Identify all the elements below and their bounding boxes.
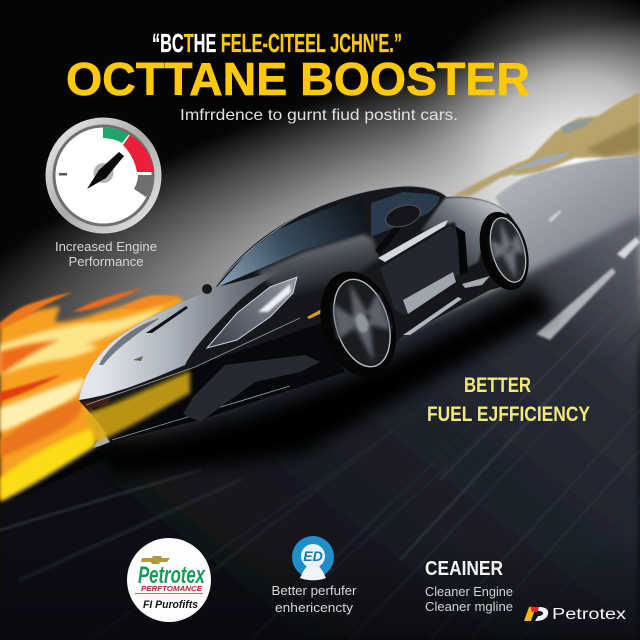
- icon: speed gauge: [46, 118, 162, 234]
- car: side intake: [455, 226, 468, 275]
- car: rear wheel: [472, 206, 537, 296]
- kicker line: “BCTHE FELE-CITEEL JCHN'E.”: [152, 28, 402, 58]
- car: front wheel: [308, 262, 408, 386]
- feature: cleaner engine: Cleaner mgline: [425, 600, 513, 614]
- logo wordmark: Petrotex: [552, 606, 626, 623]
- bottom vignette: [0, 540, 640, 640]
- icon: Petrotex mark: [524, 606, 548, 621]
- car: main body silhouette: [79, 186, 526, 441]
- feature label: Better perfufer: [272, 583, 357, 598]
- logo: Petrotex: [524, 606, 626, 623]
- headline: [66, 28, 530, 124]
- landscape: distant hills and winding road: [452, 92, 640, 219]
- icon: bowtie emblem: [141, 556, 170, 564]
- callout: better fuel efficiency: FUEL EJFFICIENCY: [427, 403, 590, 426]
- car: side skirt: [403, 297, 462, 335]
- feature: cleaner engine: [425, 558, 513, 614]
- main title: OCTTANE BOOSTER: [66, 53, 530, 105]
- brand name: Petrotex: [138, 562, 206, 589]
- car: badge: [133, 356, 143, 361]
- car: yellow headlamp glow: [84, 371, 190, 442]
- car: door reflection: [403, 272, 456, 314]
- car: red nose lip: [80, 395, 112, 412]
- performance strap: PERFTOMANCE: [141, 584, 203, 593]
- product line: FI Purofifts: [143, 599, 198, 611]
- callout: better fuel efficiency: [427, 374, 590, 426]
- car: door panel: [380, 226, 462, 315]
- far road surface: [495, 155, 640, 295]
- feature: cleaner engine: Cleaner Engine: [425, 585, 513, 599]
- car: wing mirror: [375, 201, 423, 256]
- sports car: [79, 186, 555, 478]
- car: headlight: [207, 277, 297, 348]
- road lane dashes: [536, 210, 640, 340]
- icon: blue ED badge: ED: [303, 548, 323, 564]
- car: hood vent: [146, 306, 188, 333]
- subtitle: Imfrrdence to gurnt fiud postint cars.: [180, 107, 458, 124]
- car: flank between wheels: [257, 234, 380, 300]
- car: rear fender highlight: [420, 197, 508, 270]
- car: shoulder highlight: [378, 220, 448, 262]
- car: front air intake lines: [86, 318, 300, 440]
- car: side window: [371, 192, 440, 237]
- car: rear vent: [462, 276, 490, 288]
- car: side indicator: [307, 307, 325, 319]
- gauge label: Increased Engine: [55, 240, 157, 254]
- car: hood and nose highlight: [79, 255, 310, 400]
- car: hood scoop: [99, 318, 160, 365]
- road motion streaks: [0, 280, 640, 640]
- car: windshield: [217, 198, 363, 287]
- callout: better fuel efficiency: BETTER: [464, 374, 531, 397]
- red rule: [135, 593, 203, 594]
- feature label second line: enhericencty: [275, 600, 354, 615]
- car: left mirror: [202, 284, 212, 294]
- feature: cleaner engine: CEAINER: [425, 558, 503, 580]
- fire flames behind the car: [0, 288, 200, 502]
- car: lower intake panel: [183, 355, 320, 422]
- foreground road: [0, 215, 640, 640]
- car: ground shadow: [100, 285, 555, 478]
- gauge block: [46, 118, 162, 269]
- car: front splitter: [93, 432, 110, 448]
- car: dark lower bumper: [92, 322, 345, 441]
- badge: Petrotex performance circle: [127, 538, 211, 622]
- car: headlight LEDs: [258, 284, 291, 312]
- car: roofline highlight: [215, 186, 447, 287]
- feature: better purifier: [272, 536, 357, 615]
- gauge label second line: Performance: [68, 255, 144, 269]
